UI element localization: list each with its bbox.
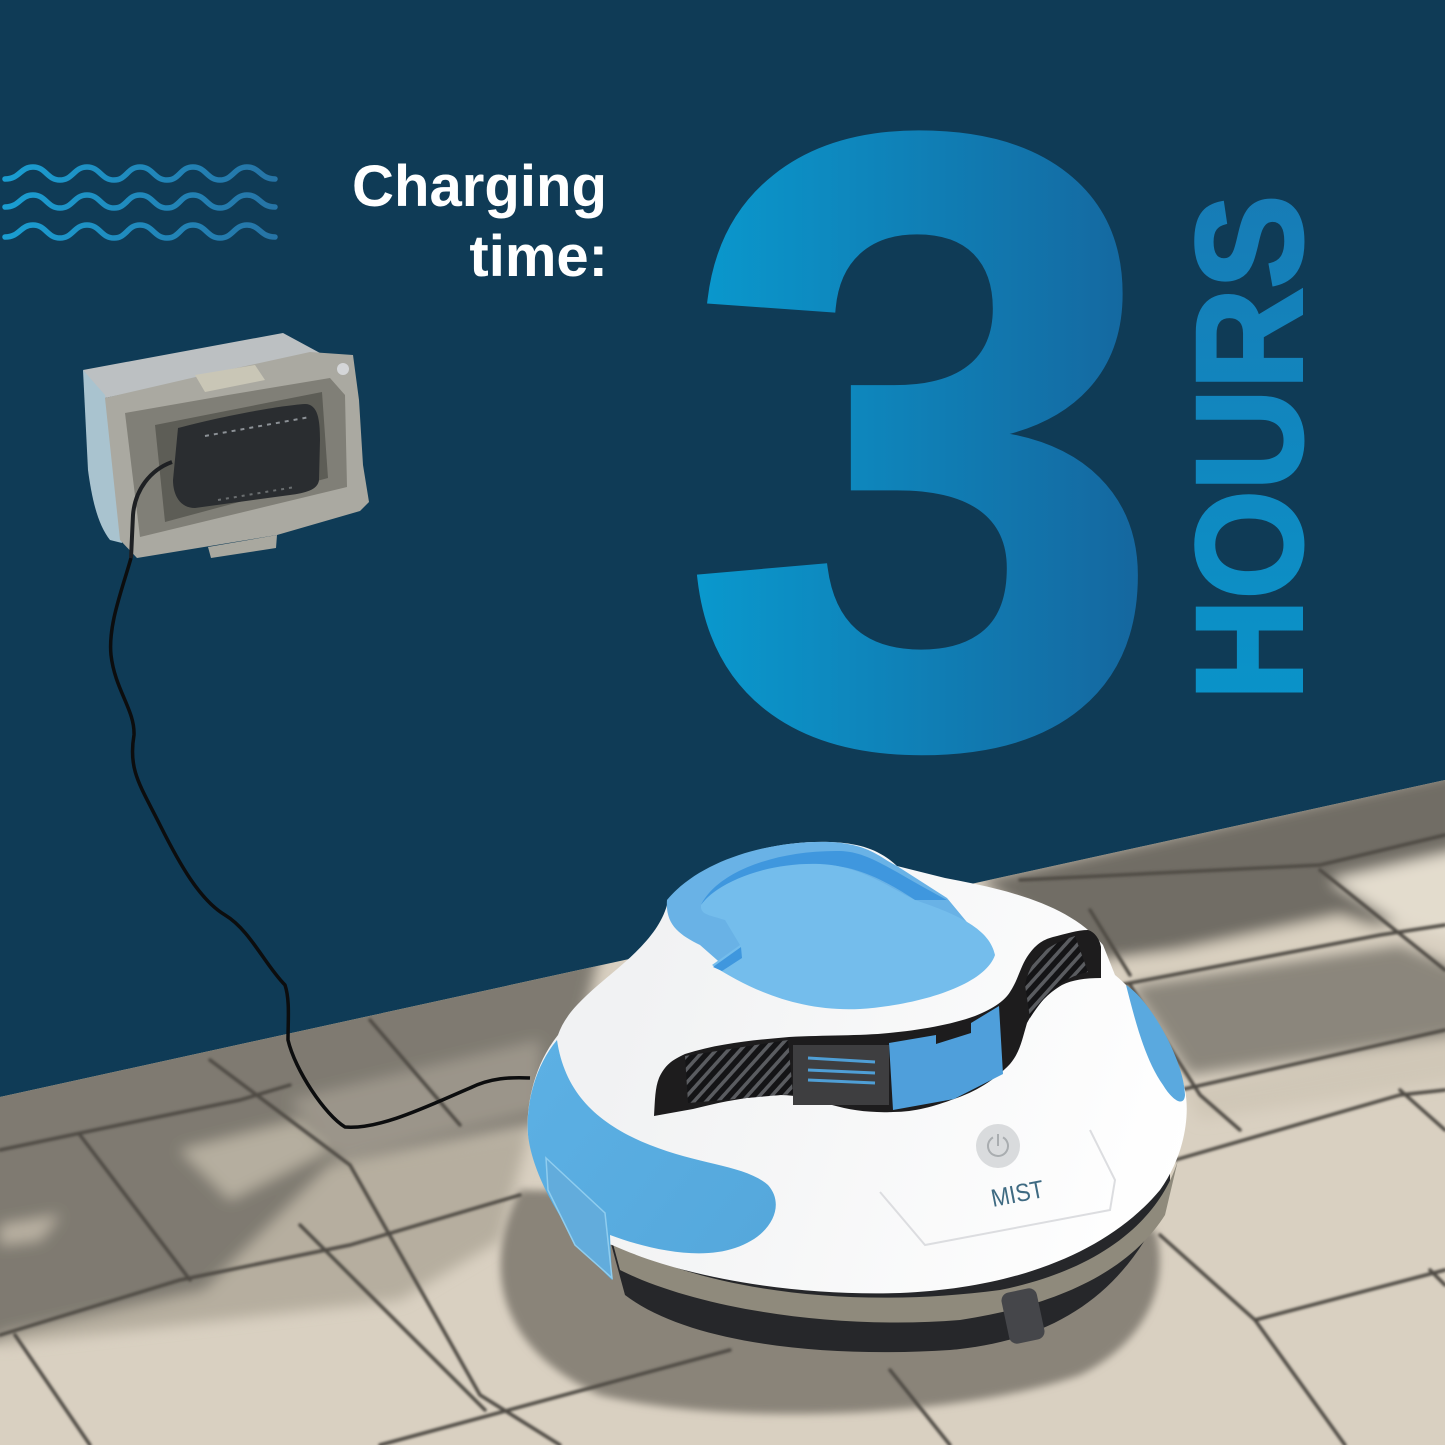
blue flap xyxy=(889,1006,1003,1110)
latch xyxy=(195,365,265,392)
heading: charging time: Charging xyxy=(352,154,607,219)
lid clasp xyxy=(713,947,742,971)
robot skirt xyxy=(612,1160,1178,1323)
power button xyxy=(976,1124,1020,1168)
robot base xyxy=(610,1150,1170,1352)
heading: charging time xyxy=(352,154,608,289)
box interior xyxy=(125,378,347,537)
outdoor charger box xyxy=(83,333,369,558)
pool robot xyxy=(528,842,1187,1352)
box back wall xyxy=(155,392,328,522)
charger cable xyxy=(111,558,530,1127)
lid outer ring xyxy=(667,842,990,983)
right blue accent xyxy=(1126,985,1185,1102)
box top surface xyxy=(83,333,320,398)
lid centre xyxy=(701,864,995,1009)
robot wheel xyxy=(1000,1287,1046,1345)
box left side xyxy=(83,370,122,543)
bottom tab xyxy=(208,535,277,558)
front plate outline xyxy=(880,1130,1115,1245)
robot white body xyxy=(528,842,1187,1293)
paving ground xyxy=(0,770,1445,1445)
power adapter xyxy=(173,404,320,508)
vent panel xyxy=(793,1045,889,1105)
lid groove xyxy=(701,851,947,905)
blue bumper xyxy=(528,1040,776,1280)
heading: charging time: time: xyxy=(469,224,608,289)
bumper clip xyxy=(546,1158,612,1278)
decorative waves icon xyxy=(5,167,275,238)
side grille xyxy=(1025,936,1088,1018)
paving joints xyxy=(0,835,1445,1445)
robot shadow xyxy=(501,1190,1160,1414)
hours label, rotated: HOURS xyxy=(1165,195,1333,700)
box cable xyxy=(131,462,172,558)
box front frame xyxy=(105,352,369,558)
robot logo: MIST xyxy=(989,1175,1046,1213)
robot vent opening xyxy=(654,930,1101,1116)
front grille xyxy=(685,1040,793,1103)
